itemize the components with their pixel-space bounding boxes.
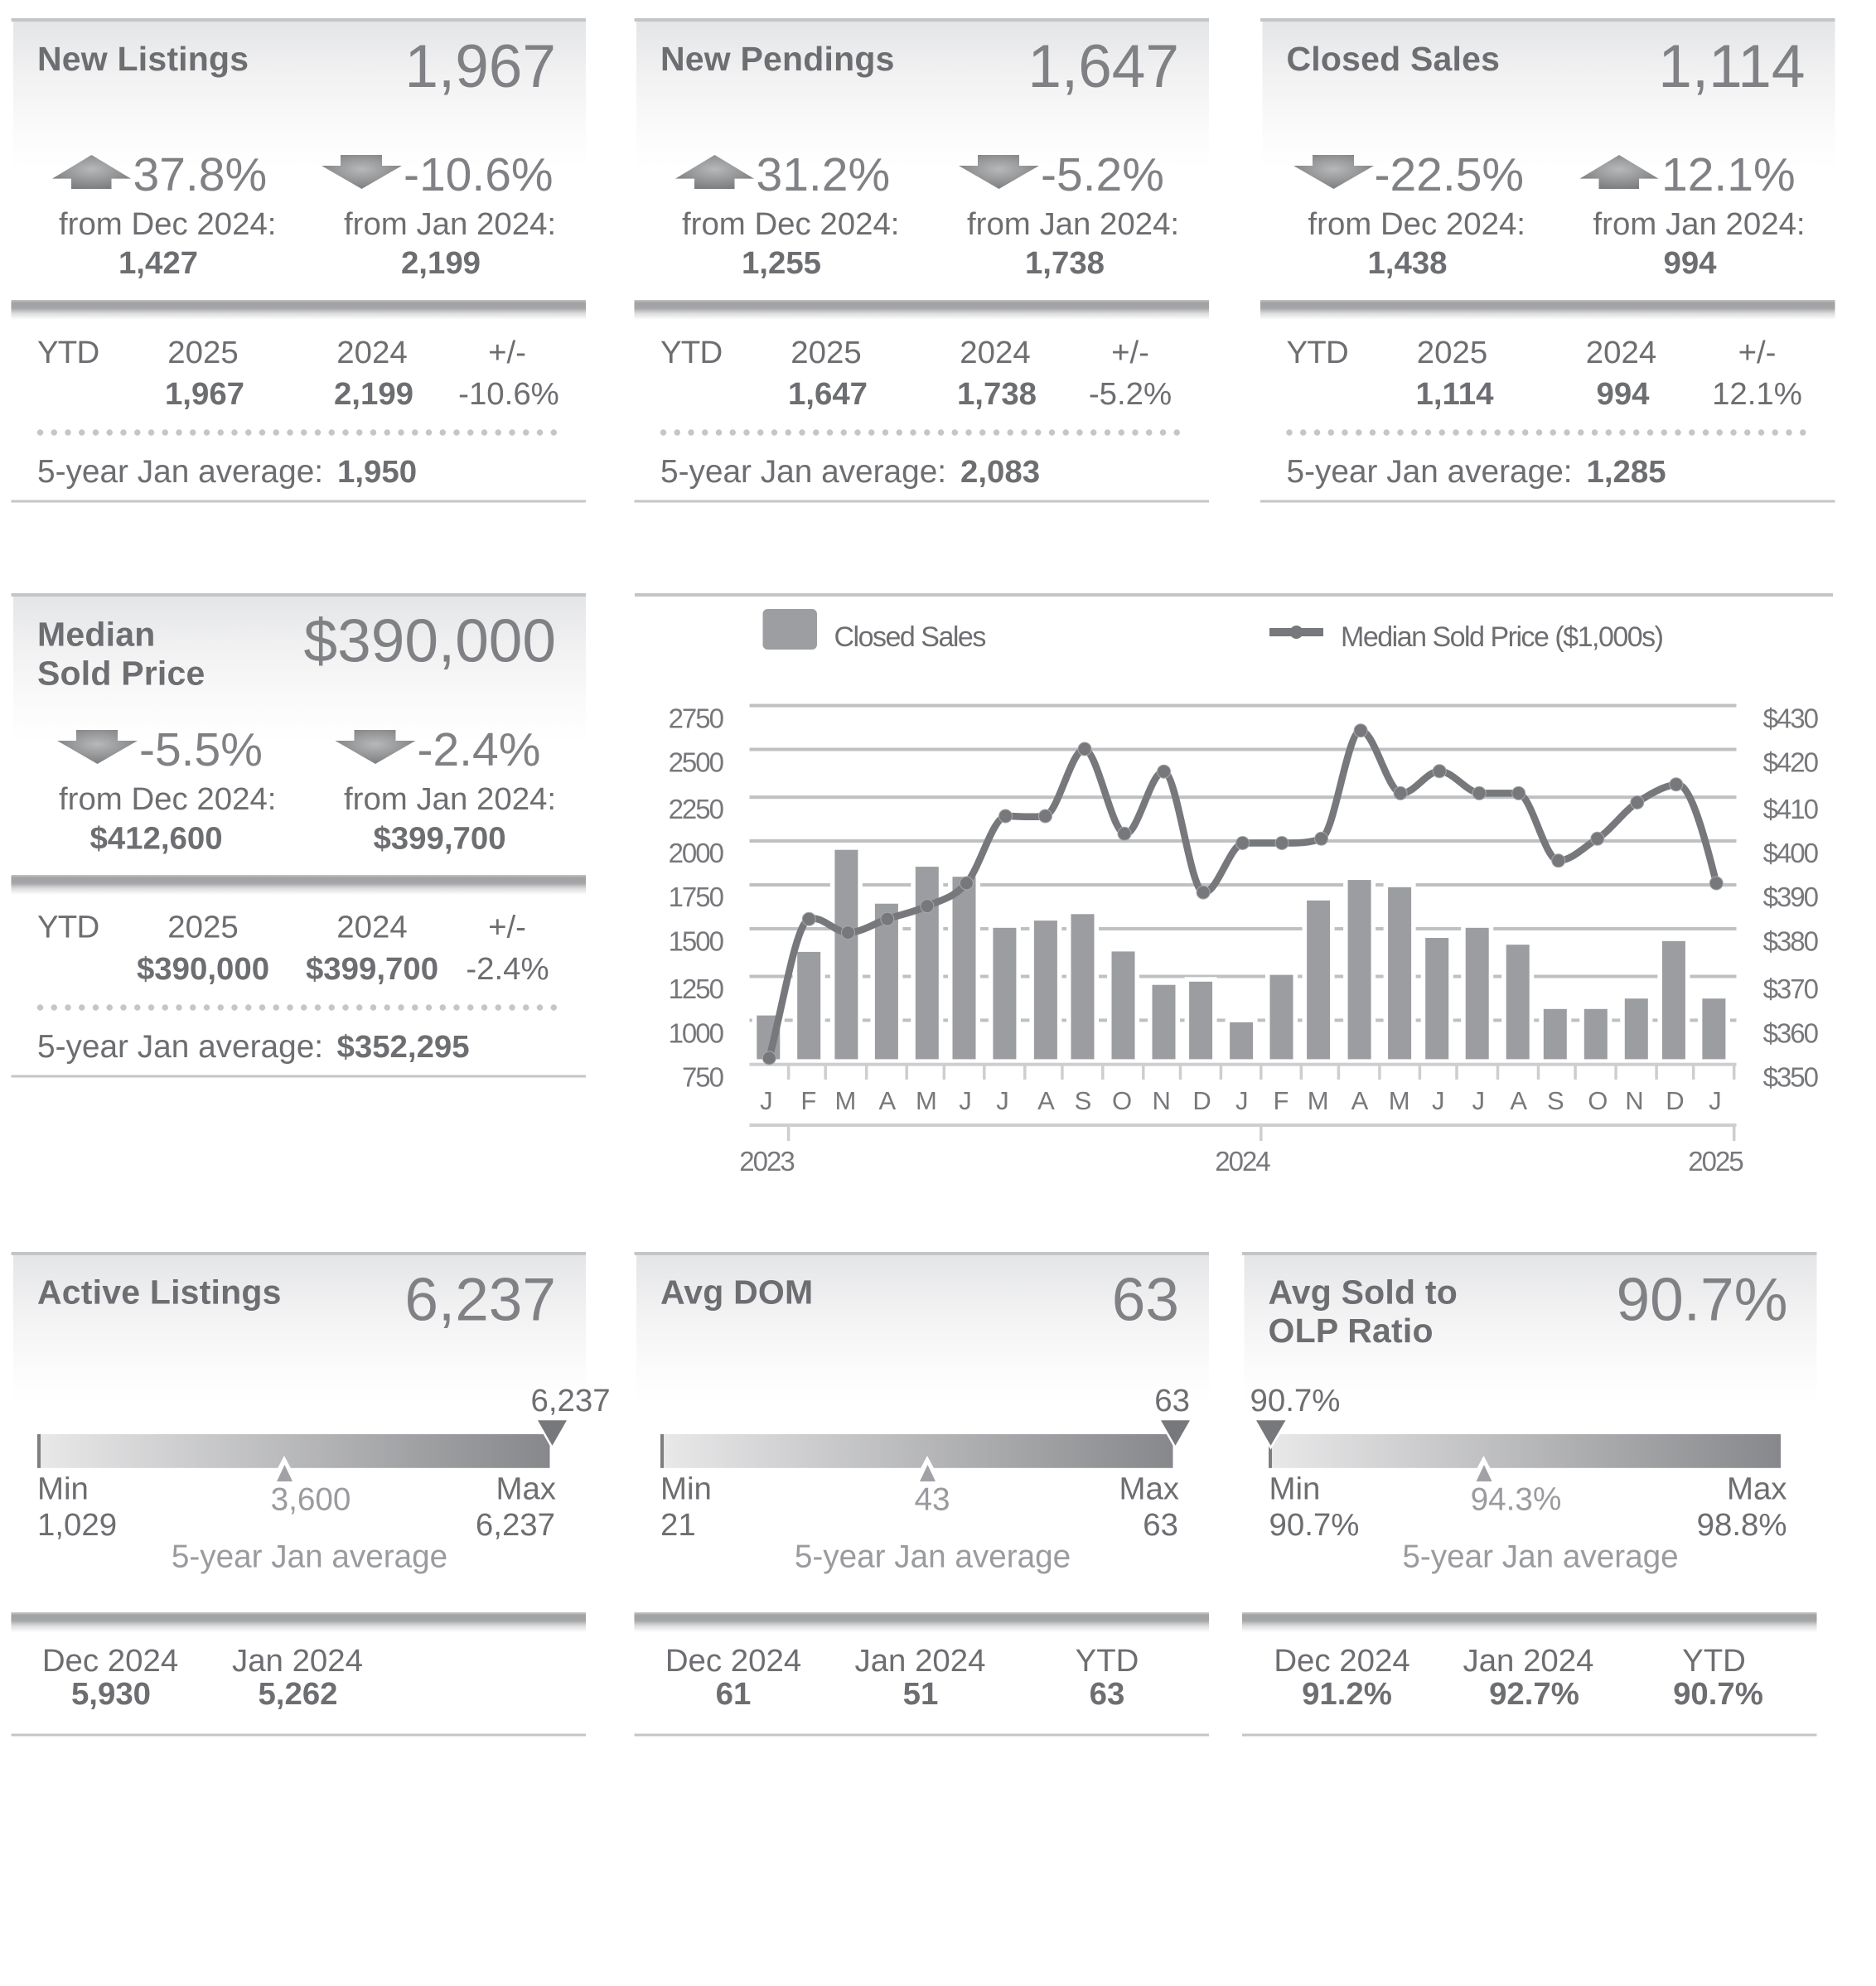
comparison values: [42, 1643, 363, 1712]
change from December: $412,600: [89, 820, 223, 857]
YTD table: 12.1%: [1712, 376, 1802, 412]
range gauge: 5-year Jan average: [1402, 1539, 1679, 1574]
right axis labels: $400: [1763, 838, 1819, 868]
month labels: F: [800, 1086, 816, 1115]
title: Avg Sold to: [1268, 1273, 1458, 1311]
legend: closed sales: [762, 609, 985, 653]
five-year average: 1,285: [1586, 454, 1666, 490]
comparison values: [1274, 1643, 1763, 1712]
change from December: 37.8%: [133, 148, 267, 201]
left axis labels: [669, 703, 724, 1092]
title: [1268, 1273, 1458, 1350]
title: Sold Price: [37, 655, 205, 693]
change from January: 1,738: [1025, 245, 1105, 281]
change from January: [322, 148, 556, 281]
change from December: [52, 148, 276, 281]
left axis labels: 2500: [669, 747, 724, 777]
change from January: from Jan 2024:: [344, 781, 556, 817]
month labels: J: [1472, 1086, 1485, 1115]
value: $390,000: [304, 608, 556, 674]
YTD table: 1,647: [788, 376, 868, 412]
change from December: 1,438: [1367, 245, 1448, 281]
range gauge: 6,237: [530, 1383, 611, 1418]
legend: median sold price: Median Sold Price ($1,000s): [1341, 621, 1663, 653]
month labels: M: [916, 1086, 937, 1115]
change from January: [335, 723, 556, 857]
year labels: 2023: [739, 1146, 794, 1177]
range gauge: 5-year Jan average: [172, 1539, 447, 1574]
panel: Active Listings: [12, 1252, 611, 1737]
range gauge: [37, 1383, 611, 1574]
month labels: A: [1510, 1086, 1527, 1115]
right axis labels: $370: [1763, 974, 1819, 1004]
YTD table: YTD: [37, 910, 99, 945]
left axis labels: 2000: [669, 838, 724, 868]
year labels: 2025: [1688, 1146, 1743, 1177]
change from December: -22.5%: [1374, 148, 1524, 201]
month labels: A: [1037, 1086, 1055, 1115]
month labels: J: [959, 1086, 972, 1115]
range gauge: 94.3%: [1471, 1481, 1561, 1517]
month labels: J: [1432, 1086, 1444, 1115]
legend: closed sales: Closed Sales: [834, 621, 985, 653]
title: OLP Ratio: [1268, 1312, 1434, 1350]
right axis labels: [1763, 703, 1819, 1092]
month labels: A: [879, 1086, 897, 1115]
panel: Median Sold Price: [12, 593, 586, 1077]
panel: Closed Sales: [1260, 18, 1835, 502]
line: median sold price: [762, 724, 1723, 1065]
title: [37, 615, 205, 693]
comparison values: Jan 2024: [1463, 1643, 1593, 1679]
right axis labels: $380: [1763, 926, 1819, 956]
YTD table: 2024: [1586, 335, 1656, 370]
value: 90.7%: [1616, 1266, 1788, 1334]
month labels: D: [1666, 1086, 1685, 1115]
month labels: S: [1547, 1086, 1564, 1115]
comparison values: [665, 1643, 1139, 1712]
YTD table: 2024: [336, 910, 408, 945]
range gauge: 43: [914, 1481, 950, 1517]
five-year average: $352,295: [336, 1029, 470, 1065]
range gauge: 6,237: [476, 1507, 555, 1543]
panel: combo chart: [635, 593, 1833, 1177]
month labels: N: [1153, 1086, 1171, 1115]
comparison values: 91.2%: [1302, 1676, 1392, 1712]
month labels: F: [1274, 1086, 1289, 1115]
comparison values: Jan 2024: [855, 1643, 985, 1679]
month labels: M: [1389, 1086, 1410, 1115]
YTD table: 2024: [960, 335, 1031, 370]
comparison values: 5,262: [258, 1676, 338, 1712]
comparison values: 63: [1090, 1676, 1124, 1712]
right axis labels: $390: [1763, 882, 1819, 912]
right axis labels: $410: [1763, 794, 1819, 824]
month labels: M: [1308, 1086, 1329, 1115]
range gauge: Max: [1727, 1471, 1787, 1506]
YTD table: [1286, 335, 1802, 412]
YTD table: YTD: [1286, 335, 1348, 370]
range gauge: Max: [1119, 1471, 1179, 1506]
year labels: [739, 1146, 1743, 1177]
comparison values: 61: [716, 1676, 751, 1712]
range gauge: 63: [1143, 1507, 1178, 1543]
value: 63: [1112, 1266, 1179, 1334]
title: New Pendings: [660, 40, 895, 78]
right axis labels: $420: [1763, 747, 1819, 777]
YTD table: -5.2%: [1089, 376, 1172, 412]
change from December: 1,255: [742, 245, 821, 281]
YTD table: -10.6%: [458, 376, 559, 412]
change from December: [675, 148, 899, 281]
change from January: -2.4%: [418, 723, 540, 776]
YTD table: $399,700: [306, 951, 438, 987]
YTD table: +/-: [488, 335, 526, 370]
YTD table: YTD: [37, 335, 99, 370]
change from December: [1293, 148, 1525, 281]
comparison values: 92.7%: [1489, 1676, 1579, 1712]
range gauge: [660, 1383, 1190, 1574]
month labels: J: [760, 1086, 773, 1115]
range gauge: Min: [660, 1471, 712, 1506]
right axis labels: $360: [1763, 1017, 1819, 1049]
month labels: D: [1192, 1086, 1211, 1115]
YTD table: -2.4%: [466, 951, 549, 987]
YTD table: +/-: [1738, 335, 1776, 370]
panel: Avg DOM: [635, 1252, 1209, 1737]
comparison values: Dec 2024: [1274, 1643, 1410, 1679]
left axis labels: 2250: [669, 794, 724, 824]
change from January: [1579, 148, 1806, 281]
change from December: [57, 723, 276, 857]
month labels: O: [1112, 1086, 1132, 1115]
month labels: [760, 1086, 1722, 1115]
panel: New Pendings: [635, 18, 1209, 502]
five-year average: [37, 1029, 470, 1065]
month labels: M: [834, 1086, 856, 1115]
range gauge: 21: [660, 1507, 696, 1543]
YTD table: [660, 335, 1172, 412]
month labels: J: [996, 1086, 1009, 1115]
comparison values: YTD: [1682, 1643, 1746, 1679]
title: Active Listings: [37, 1273, 282, 1311]
YTD table: +/-: [488, 910, 526, 945]
title: New Listings: [37, 40, 249, 78]
YTD table: 2025: [791, 335, 862, 370]
YTD table: YTD: [660, 335, 722, 370]
YTD table: [37, 910, 549, 987]
change from December: from Dec 2024:: [59, 781, 276, 817]
change from January: 2,199: [401, 245, 481, 281]
YTD table: 2025: [167, 910, 239, 945]
YTD table: 1,738: [957, 376, 1037, 412]
range gauge: Min: [1269, 1471, 1320, 1506]
YTD table: 1,114: [1416, 376, 1494, 412]
five-year average: 5-year Jan average:: [37, 454, 323, 490]
range gauge: 90.7%: [1269, 1507, 1359, 1543]
comparison values: Jan 2024: [232, 1643, 363, 1679]
left axis labels: 750: [682, 1062, 724, 1092]
five-year average: 1,950: [337, 454, 417, 490]
comparison values: Dec 2024: [42, 1643, 178, 1679]
left axis labels: 1250: [669, 974, 724, 1004]
bars: closed sales: [757, 850, 1725, 1059]
range gauge: 5-year Jan average: [795, 1539, 1071, 1574]
value: 1,647: [1027, 33, 1179, 100]
month labels: A: [1351, 1086, 1369, 1115]
change from December: from Dec 2024:: [59, 206, 276, 242]
five-year average: 5-year Jan average:: [1286, 454, 1573, 490]
five-year average: 5-year Jan average:: [37, 1029, 323, 1065]
YTD table: [37, 335, 559, 412]
change from January: from Jan 2024:: [1593, 206, 1806, 242]
range gauge: 63: [1154, 1383, 1190, 1418]
month labels: S: [1075, 1086, 1091, 1115]
left axis labels: 1500: [669, 926, 724, 956]
YTD table: 2025: [167, 335, 239, 370]
month labels: J: [1709, 1086, 1722, 1115]
month labels: O: [1588, 1086, 1608, 1115]
left axis labels: 1750: [669, 882, 724, 912]
left axis labels: 2750: [669, 703, 724, 734]
change from January: 12.1%: [1661, 148, 1796, 201]
change from January: $399,700: [373, 820, 506, 857]
range gauge: [1250, 1383, 1787, 1574]
change from December: -5.5%: [139, 723, 263, 776]
value: 1,967: [404, 33, 556, 100]
title: Closed Sales: [1286, 40, 1500, 78]
title: Median: [37, 615, 155, 653]
value: 6,237: [404, 1266, 556, 1334]
YTD table: 2024: [336, 335, 408, 370]
comparison values: Dec 2024: [665, 1643, 801, 1679]
YTD table: $390,000: [137, 951, 269, 987]
change from December: from Dec 2024:: [1308, 206, 1525, 242]
right axis labels: $350: [1763, 1062, 1819, 1092]
YTD table: 2025: [1417, 335, 1487, 370]
comparison values: 5,930: [71, 1676, 151, 1712]
change from December: 31.2%: [756, 148, 890, 201]
comparison values: YTD: [1076, 1643, 1139, 1679]
title: Avg DOM: [660, 1273, 813, 1311]
range gauge: 90.7%: [1250, 1383, 1340, 1418]
comparison values: 51: [903, 1676, 938, 1712]
change from January: [959, 148, 1179, 281]
month labels: J: [1235, 1086, 1248, 1115]
right axis labels: $430: [1763, 703, 1819, 734]
range gauge: 1,029: [37, 1507, 117, 1543]
five-year average: 5-year Jan average:: [660, 454, 946, 490]
YTD table: 994: [1596, 376, 1650, 412]
change from January: -10.6%: [404, 148, 554, 201]
year labels: 2024: [1215, 1146, 1270, 1177]
range gauge: Max: [496, 1471, 556, 1506]
left axis labels: 1000: [669, 1017, 724, 1049]
range gauge: Min: [37, 1471, 89, 1506]
range gauge: 98.8%: [1697, 1507, 1787, 1543]
change from December: 1,427: [118, 245, 198, 281]
YTD table: 1,967: [165, 376, 244, 412]
value: 1,114: [1658, 33, 1805, 100]
range gauge: 3,600: [271, 1481, 351, 1517]
panel: New Listings: [12, 18, 586, 502]
change from January: from Jan 2024:: [344, 206, 556, 242]
five-year average: 2,083: [960, 454, 1040, 490]
YTD table: 2,199: [334, 376, 413, 412]
panel: Avg Sold to OLP Ratio: [1242, 1252, 1816, 1737]
change from January: from Jan 2024:: [967, 206, 1179, 242]
comparison values: 90.7%: [1673, 1676, 1763, 1712]
month labels: N: [1625, 1086, 1644, 1115]
YTD table: +/-: [1111, 335, 1149, 370]
change from January: 994: [1663, 245, 1717, 281]
change from January: -5.2%: [1041, 148, 1164, 201]
change from December: from Dec 2024:: [682, 206, 899, 242]
